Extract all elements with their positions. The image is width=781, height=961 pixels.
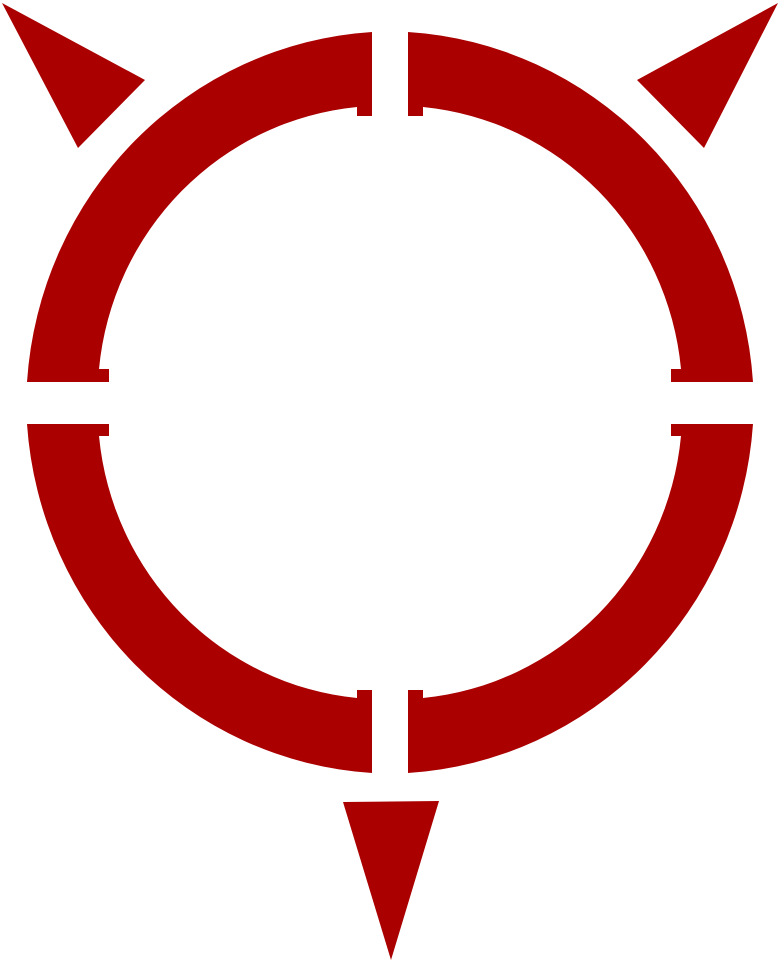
- triangle: bottom spike: [343, 801, 439, 960]
- ring arc: bottom left: [27, 424, 372, 773]
- ring arc: top left: [27, 32, 372, 382]
- ring arc: bottom right: [408, 424, 753, 773]
- triangle: top left horn: [2, 3, 145, 148]
- triangle: top right horn: [637, 3, 778, 148]
- ring arc: top right: [408, 32, 753, 382]
